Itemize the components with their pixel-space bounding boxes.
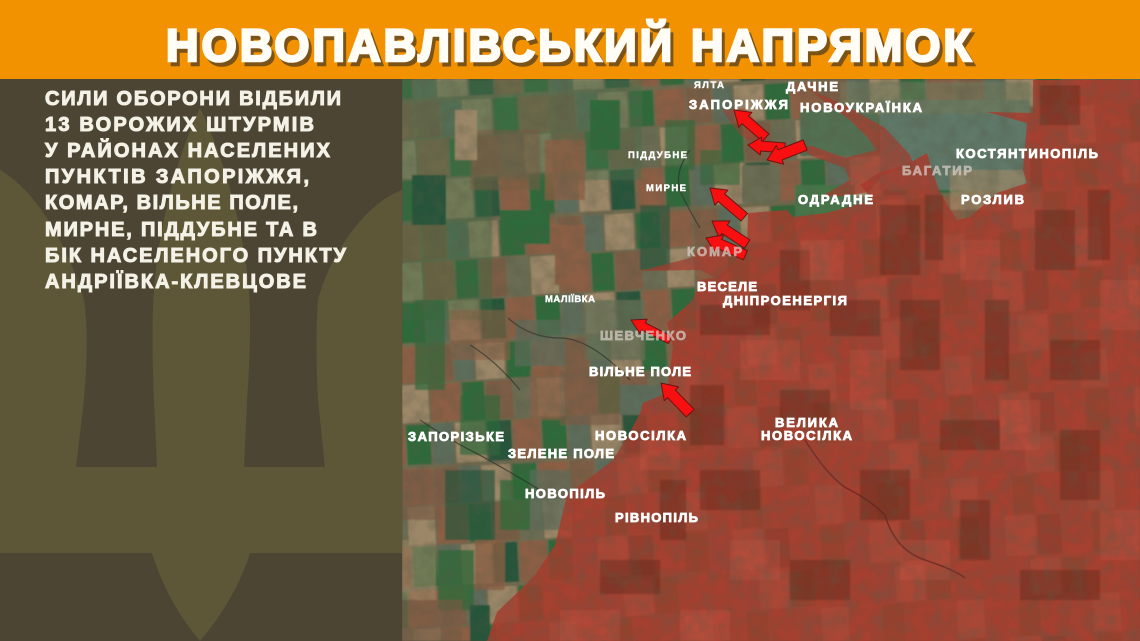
map labels: settlements: ВІЛЬНЕ ПОЛЕ bbox=[589, 364, 691, 379]
text block: summary: БІК НАСЕЛЕНОГО ПУНКТУ bbox=[45, 245, 347, 267]
trident emblem bbox=[0, 108, 402, 641]
map labels: settlements: НОВОПІЛЬ bbox=[525, 486, 605, 501]
map labels: settlements: МИРНЕ bbox=[646, 183, 686, 194]
map labels: settlements: ОДРАДНЕ bbox=[798, 192, 873, 207]
map labels: settlements: ДАЧНЕ bbox=[786, 79, 838, 94]
map labels: settlements: ДНІПРОЕНЕРГІЯ bbox=[723, 293, 847, 308]
map labels: settlements: ВЕСЕЛЕ bbox=[697, 279, 757, 294]
text block: summary bbox=[45, 88, 347, 293]
map labels: settlements: НОВОУКРАЇНКА bbox=[800, 100, 923, 115]
map labels: settlements bbox=[408, 79, 1098, 525]
map labels: settlements: ЗЕЛЕНЕ ПОЛЕ bbox=[508, 446, 614, 461]
river lines bbox=[420, 150, 700, 490]
text block: summary: ПУНКТІВ ЗАПОРІЖЖЯ, bbox=[45, 166, 309, 188]
text block: summary: СИЛИ ОБОРОНИ ВІДБИЛИ bbox=[45, 88, 341, 110]
arrows: assault directions bbox=[627, 102, 809, 420]
map labels: settlements: КОСТЯНТИНОПІЛЬ bbox=[956, 146, 1098, 161]
title: НОВОПАВЛІВСЬКИЙ НАПРЯМОК bbox=[169, 24, 975, 75]
occupied territory overlay bbox=[487, 80, 1140, 641]
header bar bbox=[0, 0, 1140, 79]
map labels: settlements: ВЕЛИКА bbox=[775, 415, 839, 430]
title: НОВОПАВЛІВСЬКИЙ НАПРЯМОК bbox=[166, 20, 972, 71]
left panel background bbox=[0, 79, 402, 641]
text block: summary: У РАЙОНАХ НАСЕЛЕНИХ bbox=[45, 138, 331, 162]
map bbox=[402, 79, 1140, 641]
map labels: settlements: НОВОСІЛКА bbox=[761, 428, 853, 443]
satellite fields bbox=[402, 79, 1140, 641]
map labels: settlements: ЯЛТА bbox=[694, 80, 724, 91]
map labels: settlements: НОВОСІЛКА bbox=[595, 428, 687, 443]
text block: summary: АНДРІЇВКА-КЛЕВЦОВЕ bbox=[45, 270, 306, 293]
text block: summary: МИРНЕ, ПІДДУБНЕ ТА В bbox=[45, 219, 317, 241]
text block: summary: 13 ВОРОЖИХ ШТУРМІВ bbox=[45, 114, 314, 136]
map labels: settlements: КОМАР bbox=[687, 244, 742, 259]
map labels: settlements: РІВНОПІЛЬ bbox=[615, 510, 698, 525]
text block: summary: КОМАР, ВІЛЬНЕ ПОЛЕ, bbox=[45, 192, 298, 214]
map labels: settlements: МАЛІЇВКА bbox=[545, 294, 595, 305]
map labels: settlements: БАГАТИР bbox=[902, 163, 972, 178]
darker and lighter field tones bbox=[560, 85, 1140, 641]
map labels: settlements: ЗАПОРІЗЬКЕ bbox=[408, 429, 504, 444]
map labels: settlements: ПІДДУБНЕ bbox=[628, 150, 687, 161]
map labels: settlements: ШЕВЧЕНКО bbox=[600, 328, 686, 343]
map labels: settlements: ЗАПОРІЖЖЯ bbox=[689, 97, 788, 112]
map labels: settlements: РОЗЛИВ bbox=[961, 192, 1024, 207]
